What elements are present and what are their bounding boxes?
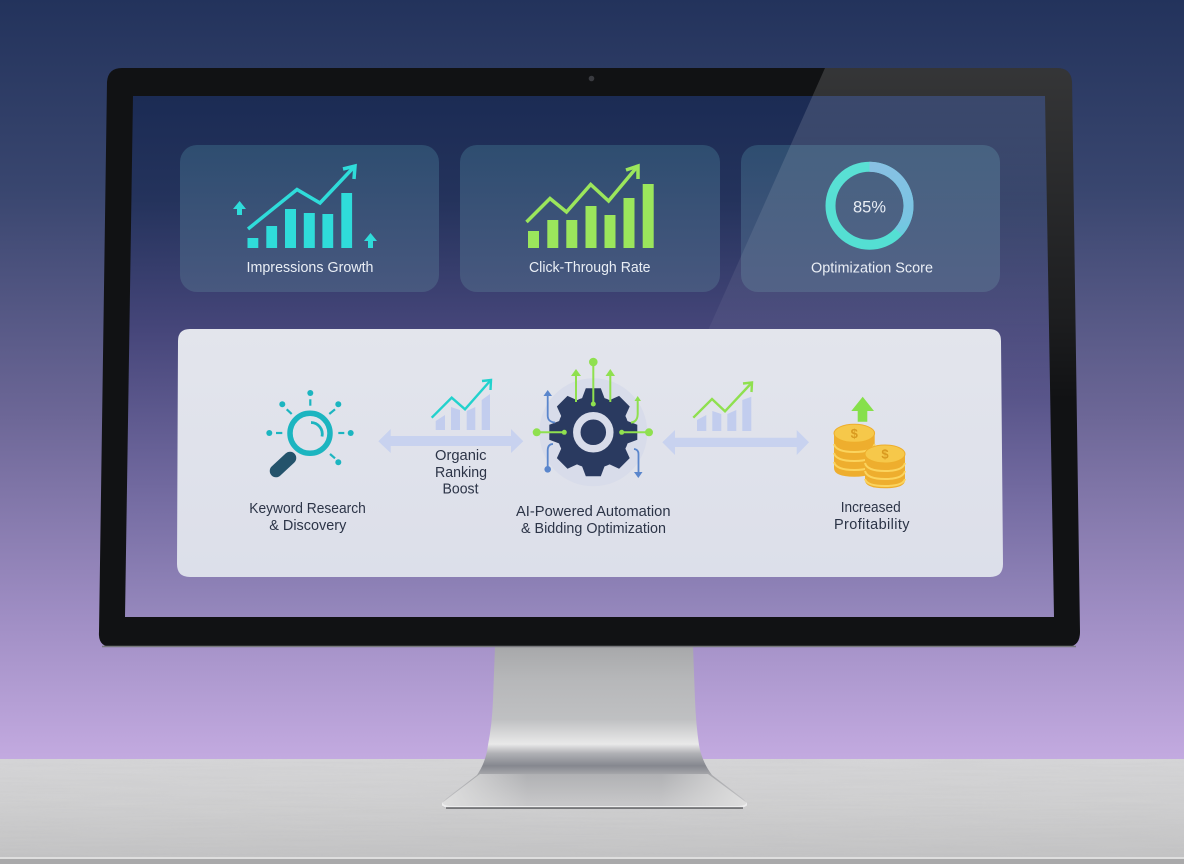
- panel: workflow: [177, 329, 1003, 577]
- card: impressions growth: [180, 145, 439, 292]
- trend arrow: click-through: [526, 166, 638, 222]
- right coin stack: $: [881, 446, 889, 462]
- small up arrow right: [364, 233, 377, 248]
- monitor bezel: [99, 68, 1080, 647]
- monitor bottom edge: [102, 646, 1076, 648]
- card: click-through rate: [460, 145, 720, 292]
- donut gauge 85%: [830, 167, 909, 245]
- small up arrow left: [233, 201, 246, 215]
- label: organic ranking boost: Organic: [435, 448, 486, 464]
- donut value: 85%: [853, 198, 886, 216]
- label: click-through rate: Click-Through Rate: [529, 260, 650, 276]
- label: AI automation: AI-Powered Automation: [516, 504, 670, 520]
- icon: gold coins: [834, 424, 905, 488]
- label: organic ranking boost: Boost: [442, 482, 478, 498]
- screen glare: [712, 68, 1076, 340]
- green circuit lines: [537, 362, 649, 432]
- label: AI automation: [516, 504, 670, 537]
- label: organic ranking boost: Ranking: [435, 465, 487, 481]
- label: increased profitability: Increased: [841, 500, 901, 516]
- webcam: [589, 76, 594, 81]
- label: keyword research: & Discovery: [269, 518, 347, 534]
- label: increased profitability: Profitability: [834, 517, 910, 533]
- label: keyword research: [249, 501, 366, 534]
- screen: [125, 96, 1054, 617]
- desk surface: [0, 759, 1184, 864]
- monitor stand: [442, 646, 747, 809]
- label: optimization score: Optimization Score: [811, 260, 933, 276]
- mini chart: organic growth: [432, 380, 491, 430]
- bars: click-through: [528, 184, 654, 248]
- icon: green up arrow: [851, 397, 874, 422]
- label: AI automation: & Bidding Optimization: [521, 521, 666, 537]
- left coin stack: $: [851, 426, 859, 441]
- label: keyword research: Keyword Research: [249, 501, 366, 517]
- mini chart: profit growth: [693, 382, 752, 431]
- gear body: [549, 388, 637, 476]
- label: increased profitability: [834, 500, 910, 533]
- card: optimization score: [741, 145, 1000, 292]
- icon: magnifying glass: [266, 390, 354, 471]
- trend arrow: impressions: [248, 166, 355, 229]
- bars: impressions: [248, 193, 352, 248]
- label: impressions growth: Impressions Growth: [246, 260, 374, 276]
- label: organic ranking boost: [435, 448, 487, 498]
- double arrow left: [378, 429, 523, 453]
- icon: AI gear: [533, 358, 653, 486]
- blue circuit lines: [548, 394, 638, 473]
- double arrow right: [662, 430, 809, 455]
